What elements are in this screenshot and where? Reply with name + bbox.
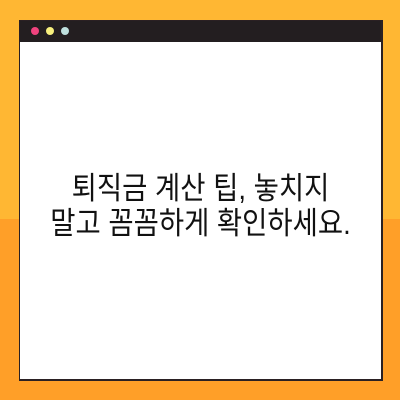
window title bar — [20, 21, 381, 42]
heading text — [50, 171, 351, 241]
heading text: 말고 꼼꼼하게 확인하세요. — [50, 206, 351, 241]
heading text: 퇴직금 계산 팁, 놓치지 — [72, 171, 329, 206]
icon: yellow dot — [46, 27, 54, 35]
icon: light blue dot — [61, 27, 69, 35]
lower orange band — [0, 219, 400, 400]
icon: pink dot — [30, 27, 38, 35]
